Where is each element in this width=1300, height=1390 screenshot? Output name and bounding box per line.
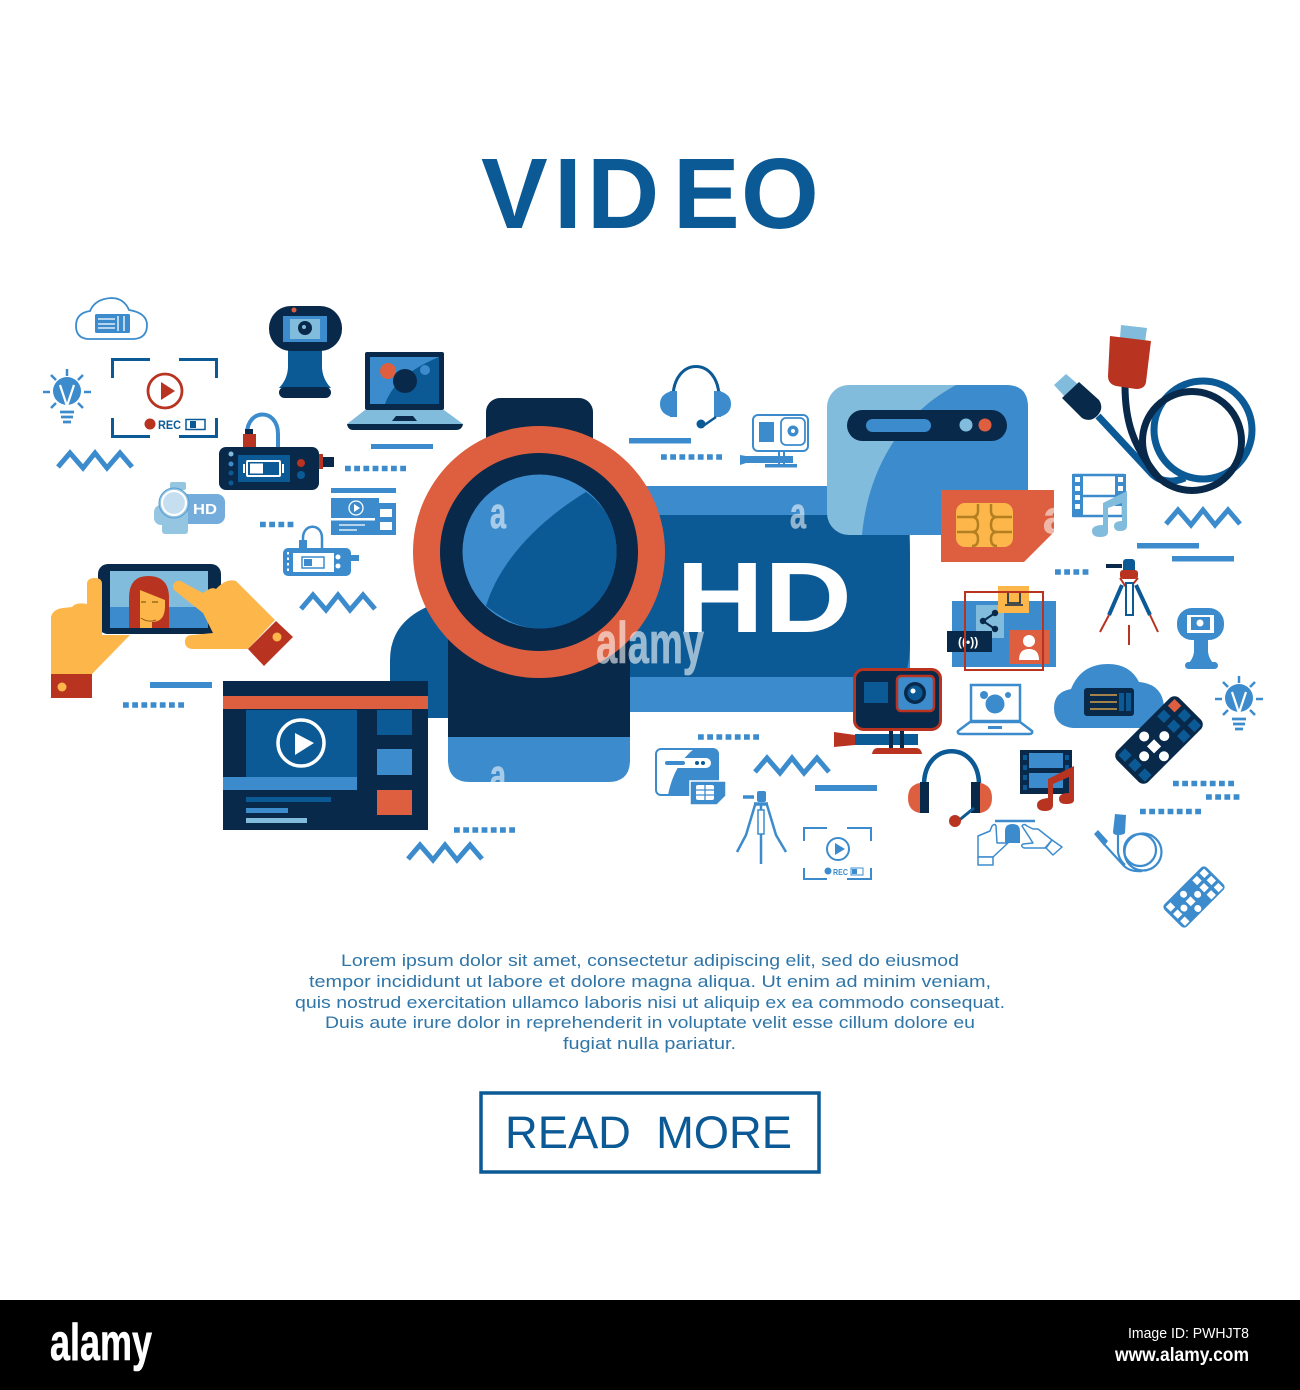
right hand xyxy=(1022,824,1052,848)
line and dots under hands xyxy=(123,682,212,705)
footer bar xyxy=(0,1300,1300,1390)
right cuff xyxy=(248,621,293,666)
body text: Duis aute irure dolor in reprehenderit in voluptate velit esse cillum dolore eu xyxy=(325,1014,975,1032)
icon: headset colour xyxy=(908,751,992,827)
watermark logo: alamy xyxy=(596,611,704,676)
icon: cloud outline xyxy=(76,298,147,339)
icon: battery device dark xyxy=(219,414,334,490)
icon: HD mini camcorder xyxy=(154,482,225,534)
zigzag 3 xyxy=(1166,510,1240,525)
navy wire xyxy=(1125,385,1242,490)
zigzag 1 xyxy=(58,453,132,468)
screen panel large xyxy=(827,385,1028,535)
icon: webcam light xyxy=(1177,608,1224,669)
body text: tempor incididunt ut labore et dolore magna aliqua. Ut enim ad minim veniam, xyxy=(309,973,991,991)
watermark letter: a xyxy=(490,751,506,800)
icon: battery device light xyxy=(283,527,359,576)
icon: share panel xyxy=(947,586,1056,670)
zigzag 2 xyxy=(301,595,375,610)
left hand xyxy=(978,824,1008,857)
icon: laptop dark xyxy=(347,352,463,430)
icon: webcam dark xyxy=(269,306,342,398)
icon: remote light xyxy=(1162,865,1226,929)
body text xyxy=(295,952,1005,1053)
left cuff xyxy=(51,674,92,698)
dots and zigzag below player xyxy=(408,830,517,860)
left hand xyxy=(51,578,130,674)
camcorder rear body xyxy=(390,597,470,718)
icon: cloud filled xyxy=(1054,664,1164,728)
left cuff xyxy=(978,857,993,865)
lines and dots right xyxy=(1055,543,1234,572)
icon: screen with SIM mini xyxy=(656,749,726,805)
video player large xyxy=(223,681,428,830)
icon: share panel: ((•)) xyxy=(958,635,978,649)
read more button xyxy=(481,1093,819,1172)
website: www.alamy.com xyxy=(1114,1345,1249,1366)
icon: film and music colour xyxy=(1020,750,1074,811)
footer logo: alamy xyxy=(50,1314,152,1372)
line and dots under headset xyxy=(629,438,724,457)
icon: video player light xyxy=(331,488,396,535)
phone xyxy=(98,564,221,634)
watermark letter: a xyxy=(790,489,806,538)
icon: laptop outline xyxy=(958,685,1032,734)
right hand xyxy=(173,580,275,649)
watermark xyxy=(490,489,1069,800)
icon: action camera outline xyxy=(740,415,808,468)
read more button: READ MORE xyxy=(505,1107,792,1158)
icon: record frame xyxy=(112,360,216,436)
HD label: HD xyxy=(676,542,852,654)
icon: cable set xyxy=(1054,325,1252,490)
watermark letter: a xyxy=(1043,491,1069,543)
icon: action camera colour xyxy=(834,670,940,754)
body text: fugiat nulla pariatur. xyxy=(563,1035,736,1053)
phone top xyxy=(995,820,1035,822)
dots above mini screen xyxy=(698,734,761,740)
icon: record frame: REC xyxy=(158,418,181,432)
camcorder base xyxy=(448,737,630,782)
body text: Lorem ipsum dolor sit amet, consectetur adipiscing elit, sed do eiusmod xyxy=(341,952,959,970)
red plug xyxy=(1108,325,1151,389)
zigzag 4 xyxy=(755,758,829,773)
usb plug xyxy=(1054,374,1101,420)
icon: light bulb right xyxy=(1215,676,1263,729)
lens xyxy=(413,426,665,678)
camcorder side panel xyxy=(600,486,910,712)
body text: quis nostrud exercitation ullamco laboris nisi ut aliquip ex ea commodo consequat. xyxy=(295,994,1005,1012)
icon: cable light xyxy=(1094,814,1162,871)
icon: light bulb left xyxy=(43,369,91,422)
camcorder grip xyxy=(448,630,630,737)
line and dots xyxy=(260,444,433,524)
right cuff xyxy=(1046,840,1062,855)
icon: HD mini camcorder: HD xyxy=(193,501,217,518)
icon: tripod colour xyxy=(1100,559,1158,645)
icon: hands with phone outline xyxy=(978,821,1062,865)
portrait xyxy=(1005,824,1020,843)
icon: film and music light xyxy=(1072,474,1127,537)
icon: headset light xyxy=(660,366,731,428)
line lower centre xyxy=(815,785,877,791)
title: VIDEO xyxy=(481,138,819,250)
main camcorder xyxy=(390,398,910,782)
SIM card large xyxy=(941,490,1054,562)
icon: record frame light xyxy=(804,828,871,879)
camcorder top strap xyxy=(486,398,593,478)
icon: record frame light: REC xyxy=(833,867,848,877)
image id: Image ID: PWHJT8 xyxy=(1128,1325,1249,1342)
dots far right xyxy=(1140,784,1241,812)
camcorder HD panel xyxy=(600,515,910,677)
watermark letter: a xyxy=(490,489,506,538)
hands holding phone xyxy=(51,564,293,698)
blue wire xyxy=(1098,381,1252,481)
woman portrait xyxy=(129,576,169,628)
icon: tripod light xyxy=(737,791,786,864)
icon: remote dark xyxy=(1112,693,1206,787)
